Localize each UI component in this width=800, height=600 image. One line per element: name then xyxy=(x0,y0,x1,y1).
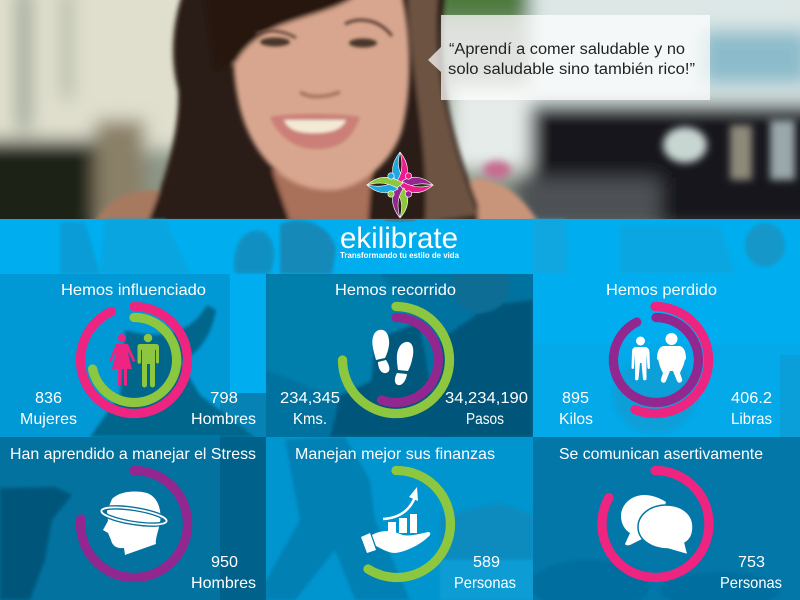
callout quote xyxy=(428,15,710,100)
ring: pink and green xyxy=(80,306,187,414)
panel: finanzas xyxy=(295,446,516,592)
stat: hombres: Hombres xyxy=(191,411,256,428)
icon: thin and heavy person xyxy=(632,333,686,383)
stat: mujeres: Mujeres xyxy=(20,411,77,428)
stat: libras: Libras xyxy=(731,411,772,428)
stat: hombres xyxy=(191,390,256,428)
stat: personas: 753 xyxy=(738,554,765,571)
stat: hombres: 950 xyxy=(211,554,238,571)
stat: mujeres xyxy=(20,390,77,428)
icon: speech bubbles xyxy=(621,495,693,554)
stat: kms: 234,345 xyxy=(280,390,340,407)
stat: kilos xyxy=(559,390,593,428)
stat: pasos xyxy=(445,390,528,428)
photo: smiling woman xyxy=(0,0,800,240)
icon: hand with growth chart xyxy=(361,487,430,553)
panel: hemos recorrido: Hemos recorrido xyxy=(335,282,456,299)
panel: hemos perdido xyxy=(559,282,772,428)
stat: libras: 406.2 xyxy=(731,390,772,407)
panel: comunicacion: Se comunican asertivamente xyxy=(559,446,763,463)
panel: stress: Han aprendido a manejar el Stress xyxy=(10,446,256,463)
stat: pasos: 34,234,190 xyxy=(445,390,528,407)
stat: kilos: Kilos xyxy=(559,411,593,428)
icon: woman and man xyxy=(109,334,159,388)
panel: hemos recorrido xyxy=(280,282,528,428)
ring: purple xyxy=(81,470,188,577)
stat: personas: 589 xyxy=(473,554,500,571)
ring: pink and purple xyxy=(613,306,709,413)
stat: personas: Personas xyxy=(720,575,782,592)
stat: hombres: 798 xyxy=(210,390,238,407)
panel: hemos influenciado xyxy=(20,282,256,428)
icon: footprints xyxy=(372,330,413,385)
panel: hemos influenciado: Hemos influenciado xyxy=(61,282,206,299)
stat: kms xyxy=(280,390,340,428)
stat: libras xyxy=(731,390,772,428)
panel: comunicacion xyxy=(559,446,782,592)
logo flower xyxy=(367,152,433,222)
callout quote: “Aprendí a comer saludable y no xyxy=(449,41,685,58)
stat: kms: Kms. xyxy=(293,411,327,428)
stat: hombres: Hombres xyxy=(191,575,256,592)
stat: hombres xyxy=(191,554,256,592)
stat: kilos: 895 xyxy=(562,390,589,407)
stat: pasos: Pasos xyxy=(466,411,504,428)
ring: green xyxy=(368,470,450,577)
icon: head with orbit rings xyxy=(100,491,168,555)
ring: pink xyxy=(602,470,709,577)
brand name: Transformando tu estilo de vida xyxy=(340,250,459,260)
panel: stress xyxy=(10,446,256,592)
panel: hemos perdido: Hemos perdido xyxy=(606,282,717,299)
panel: finanzas: Manejan mejor sus finanzas xyxy=(295,446,495,463)
panel backgrounds with photo silhouettes xyxy=(0,257,800,600)
stat: mujeres: 836 xyxy=(35,390,62,407)
hair and shoulders xyxy=(95,0,538,222)
callout quote: solo saludable sino también rico!” xyxy=(448,61,695,78)
stat: personas: Personas xyxy=(454,575,516,592)
ring: green and purple xyxy=(342,306,449,414)
stat: personas xyxy=(720,554,782,592)
brand name: ekilibrate xyxy=(340,222,458,255)
blue background panel xyxy=(0,219,800,600)
stat: personas xyxy=(454,554,516,592)
